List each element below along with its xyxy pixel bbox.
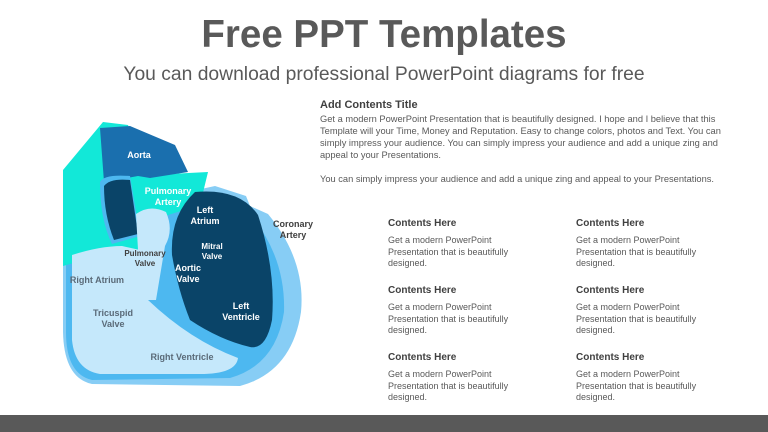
item 1: Contents Here xyxy=(388,218,456,229)
subtitle: You can download professional PowerPoint diagrams for free xyxy=(123,64,645,85)
item 4: Contents Here xyxy=(576,285,644,296)
heart outer band xyxy=(63,186,302,386)
main text block: Add Contents Title xyxy=(320,99,418,111)
labels: Ventricle xyxy=(222,312,260,322)
item 5: Get a modern PowerPoint Presentation that is beautifully designed. xyxy=(388,369,508,402)
item 5: Contents Here xyxy=(388,352,456,363)
cyan pulmonary artery xyxy=(63,122,208,266)
item 5 xyxy=(388,352,508,402)
item 2: Contents Here xyxy=(576,218,644,229)
item 4 xyxy=(576,285,696,335)
left chambers xyxy=(172,191,273,347)
heart diagram: Coronary xyxy=(273,219,313,229)
main text block: Get a modern PowerPoint Presentation that is beautifully designed. I hope and I believe that this Template will your Time, Money and Reputation. Easy to change colors, photos and Text. You can simply impress your audience. You can simply impress your audience and add a unique zing and appeal to your Presentations. xyxy=(320,114,721,160)
labels: Pulmonary xyxy=(145,186,191,196)
labels: Left xyxy=(233,301,249,311)
item 6: Contents Here xyxy=(576,352,644,363)
item 3: Get a modern PowerPoint Presentation that is beautifully designed. xyxy=(388,302,508,335)
item 3 xyxy=(388,285,508,335)
heart diagram: Tricuspid xyxy=(93,308,133,318)
labels: Valve xyxy=(202,252,223,261)
labels: Atrium xyxy=(190,216,220,226)
footer bar xyxy=(0,415,768,432)
labels: Artery xyxy=(155,197,181,207)
heart diagram: Valve xyxy=(101,319,125,329)
item 4: Get a modern PowerPoint Presentation that is beautifully designed. xyxy=(576,302,696,335)
heart diagram: Valve xyxy=(135,259,156,268)
heart diagram xyxy=(63,122,313,386)
heart diagram: Pulmonary xyxy=(124,249,166,258)
item 3: Contents Here xyxy=(388,285,456,296)
heart diagram: Right Atrium xyxy=(70,275,124,285)
heart diagram: Artery xyxy=(280,230,306,240)
labels: Mitral xyxy=(201,242,223,251)
item 6 xyxy=(576,352,696,402)
aorta xyxy=(100,126,188,182)
labels xyxy=(127,150,260,322)
labels: Aorta xyxy=(127,150,152,160)
item 1: Get a modern PowerPoint Presentation that is beautifully designed. xyxy=(388,235,508,268)
item 2 xyxy=(576,218,696,268)
item 6: Get a modern PowerPoint Presentation that is beautifully designed. xyxy=(576,369,696,402)
title: Free PPT Templates xyxy=(201,13,567,56)
main text block: You can simply impress your audience and add a unique zing and appeal to your Presentations. xyxy=(320,174,714,184)
heart diagram: Right Ventricle xyxy=(150,352,214,362)
item 1 xyxy=(388,218,508,268)
right chambers light xyxy=(72,246,238,374)
labels: Aortic xyxy=(175,263,201,273)
labels: Left xyxy=(197,205,213,215)
item 2: Get a modern PowerPoint Presentation that is beautifully designed. xyxy=(576,235,696,268)
main text block xyxy=(320,99,721,184)
labels: Valve xyxy=(176,274,200,284)
